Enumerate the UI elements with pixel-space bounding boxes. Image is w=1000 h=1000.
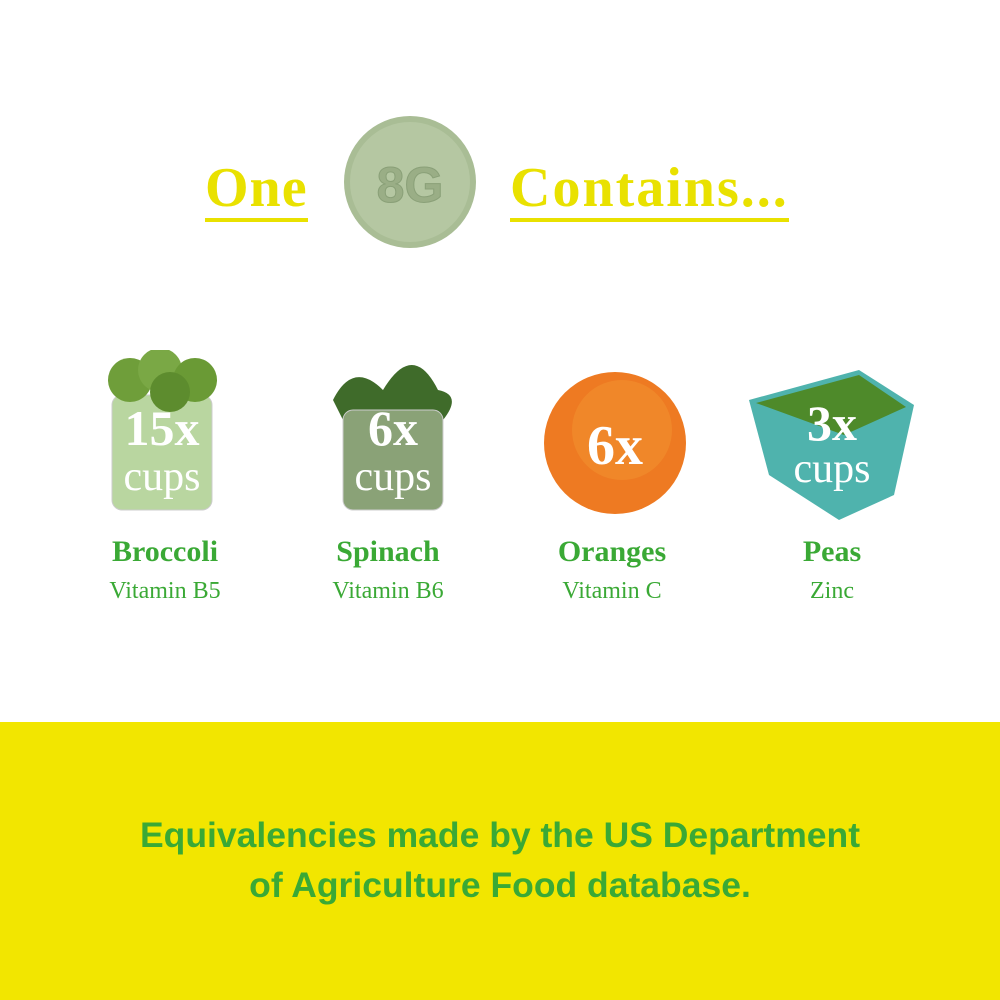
footer text: Equivalencies made by the US Department — [140, 815, 860, 855]
text: Zinc — [810, 578, 854, 604]
text: Oranges — [558, 535, 666, 568]
text: Spinach — [336, 535, 440, 568]
text: Peas — [803, 535, 861, 568]
footer text: of Agriculture Food database. — [249, 865, 751, 905]
icon: peas basket — [749, 370, 914, 520]
item: spinach — [332, 365, 452, 604]
footer band — [0, 722, 1000, 1000]
item: peas — [749, 370, 914, 604]
icon: broccoli glass: 15x — [124, 400, 200, 456]
icon: tablet: 8G — [377, 157, 443, 213]
text: Vitamin B6 — [332, 578, 444, 604]
title: Contains...: Contains... — [510, 157, 789, 219]
text: Vitamin B5 — [109, 578, 221, 604]
footer text — [140, 815, 860, 905]
icon: orange: 6x — [587, 415, 643, 477]
text: Vitamin C — [562, 578, 662, 604]
item: broccoli — [108, 350, 221, 604]
icon: spinach glass: cups — [354, 454, 432, 500]
icon: broccoli glass — [108, 350, 217, 510]
icon: tablet — [344, 116, 476, 248]
icon: spinach glass — [333, 365, 452, 510]
text: Broccoli — [112, 535, 218, 568]
icon: peas basket: 3x — [807, 395, 857, 451]
icon: orange — [544, 372, 686, 514]
icon: broccoli glass: cups — [124, 454, 200, 500]
icon: peas basket: cups — [794, 446, 870, 492]
icon: spinach glass: 6x — [368, 400, 418, 456]
item: oranges — [544, 372, 686, 604]
title: One: One — [205, 157, 308, 219]
